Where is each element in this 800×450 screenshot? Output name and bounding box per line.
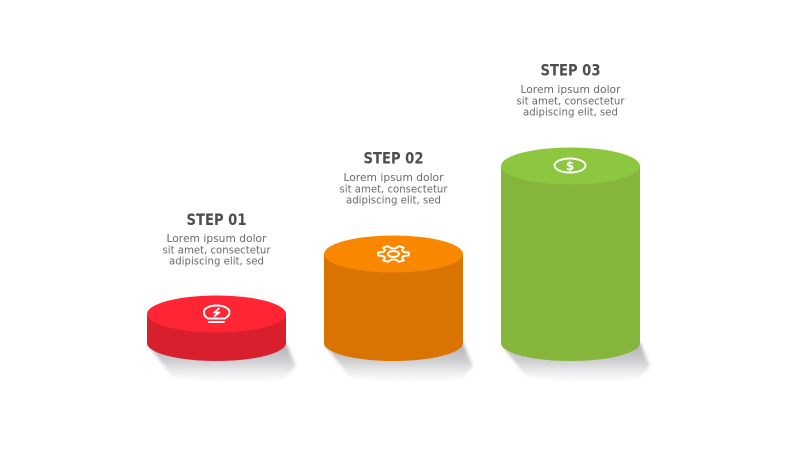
- cylinder top: step 01: [147, 296, 286, 332]
- cylinder shadow: step 01: [147, 343, 296, 382]
- cylinder body: step 02: [324, 254, 463, 361]
- text block: step 02: adipiscing elit, sed: [346, 194, 441, 206]
- cylinder shadow: step 02: [324, 343, 473, 382]
- icon: dollar coin: [554, 158, 586, 173]
- text block: step 01: adipiscing elit, sed: [169, 254, 264, 268]
- panel: step 01: [147, 210, 296, 382]
- panel: step 02: [324, 148, 473, 382]
- text block: step 03: [516, 83, 625, 118]
- text block: step 01: sit amet, consectetur: [162, 244, 271, 256]
- text block: step 02: [340, 171, 448, 206]
- icon: gear: [378, 246, 409, 262]
- heading: step 01: STEP 01: [186, 210, 246, 229]
- cylinder body: step 03: [501, 166, 640, 361]
- heading: step 02: STEP 02: [364, 148, 424, 168]
- text block: step 02: sit amet, consectetur: [340, 182, 448, 196]
- panel: step 03: [501, 60, 650, 382]
- text block: step 01: Lorem ipsum dolor: [166, 232, 267, 245]
- heading: step 03: STEP 03: [540, 60, 600, 80]
- text block: step 02: Lorem ipsum dolor: [344, 171, 444, 184]
- icon: dollar coin: $: [566, 159, 574, 173]
- cylinder body: step 01: [147, 314, 286, 361]
- text block: step 03: sit amet, consectetur: [516, 94, 625, 108]
- cylinder top: step 03: [501, 148, 640, 184]
- cylinder shadow: step 03: [501, 343, 650, 382]
- text block: step 03: adipiscing elit, sed: [523, 106, 618, 118]
- icon: light bulb: [204, 306, 230, 322]
- text block: step 03: Lorem ipsum dolor: [520, 83, 621, 96]
- cylinder top: step 02: [324, 236, 463, 272]
- text block: step 01: [162, 232, 271, 268]
